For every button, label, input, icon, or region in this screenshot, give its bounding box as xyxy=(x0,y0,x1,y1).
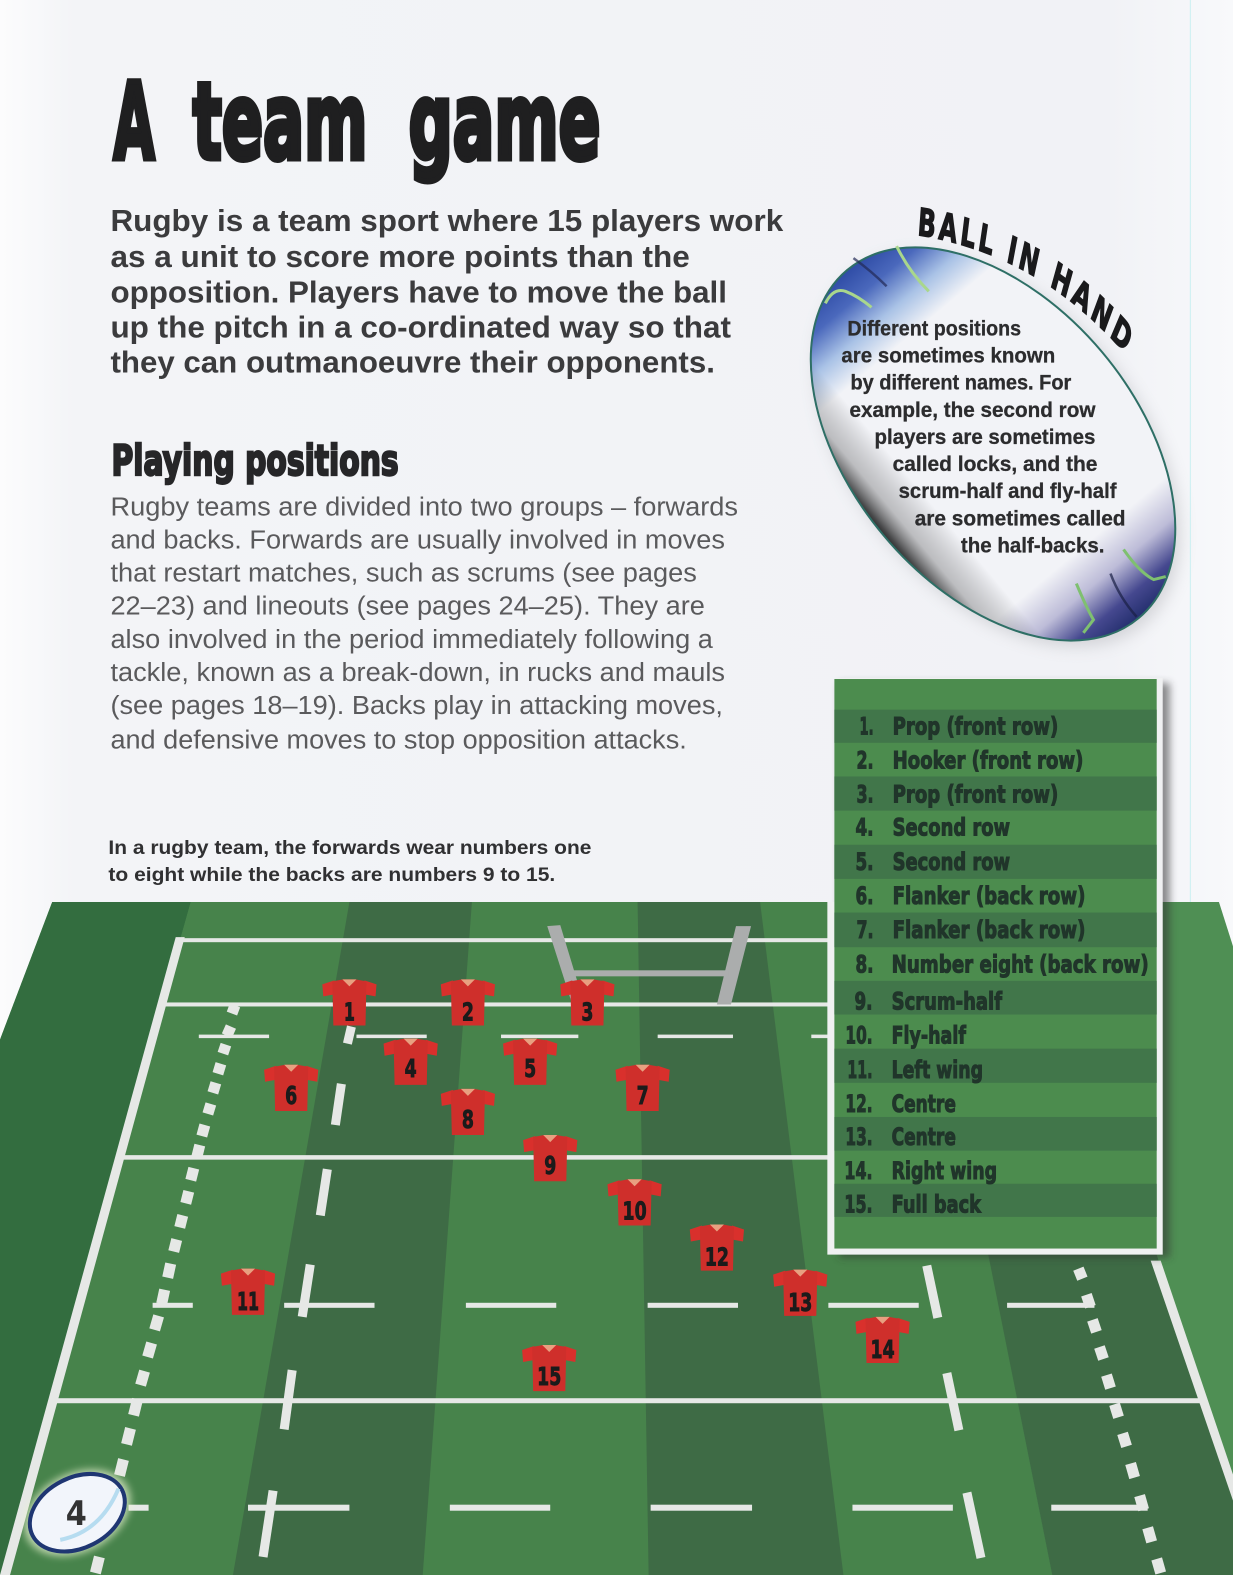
title: game xyxy=(409,61,600,185)
callout text: are sometimes known xyxy=(841,343,1055,368)
shirt 8: 8 xyxy=(462,1105,474,1134)
page number ball xyxy=(9,1452,145,1573)
shirt 9: 9 xyxy=(544,1151,556,1180)
shirt 15 xyxy=(522,1345,576,1391)
panel list: 12. xyxy=(845,1090,873,1118)
intro text xyxy=(110,205,783,380)
panel stripes xyxy=(834,710,1157,1217)
shirt 11 xyxy=(221,1269,275,1316)
shirt 8 xyxy=(441,1089,495,1135)
panel list: Fly-half xyxy=(892,1022,966,1050)
panel list: Second row xyxy=(893,848,1010,876)
body text: playing positions: (see pages 18–19). Backs play in attacking moves, xyxy=(110,690,723,720)
panel list: Centre xyxy=(892,1123,956,1151)
callout text: by different names. For xyxy=(850,370,1072,395)
panel list: Prop (front row) xyxy=(893,781,1058,809)
panel list: 11. xyxy=(847,1056,873,1084)
intro text: opposition. Players have to move the ball xyxy=(110,276,727,309)
panel list: 14. xyxy=(844,1157,873,1185)
callout text: players are sometimes xyxy=(875,424,1095,449)
panel list: Hooker (front row) xyxy=(893,746,1083,774)
players xyxy=(221,979,910,1391)
panel list: 7. xyxy=(856,916,874,944)
title: A xyxy=(113,61,155,185)
body text: playing positions: that restart matches, such as scrums (see pages xyxy=(110,558,697,588)
pitch markings xyxy=(0,937,1233,1575)
panel list: 2. xyxy=(856,746,874,774)
shirt 5 xyxy=(503,1039,557,1085)
panel list: 9. xyxy=(854,987,873,1015)
callout heading: ball in hand: BALL IN HAND xyxy=(918,206,1132,348)
heading: playing positions: Playing positions xyxy=(111,436,399,485)
title xyxy=(113,61,600,185)
inner dashes and dotted lines xyxy=(95,1005,1161,1573)
body text: playing positions: and defensive moves to stop opposition attacks. xyxy=(110,724,687,754)
panel list: 8. xyxy=(855,950,874,978)
icon: rugby ball xyxy=(738,178,1233,716)
panel list: Centre xyxy=(892,1090,956,1118)
panel: positions list xyxy=(827,678,1170,1258)
caption xyxy=(108,838,591,886)
pitch surface xyxy=(0,902,1233,1575)
shirt 12 xyxy=(690,1224,744,1272)
shirt 1: 1 xyxy=(344,998,355,1027)
body text: playing positions: also involved in the period immediately following a xyxy=(110,624,713,654)
shirt 2: 2 xyxy=(462,998,474,1027)
shirt 5: 5 xyxy=(524,1054,536,1083)
panel list: 1. xyxy=(859,712,874,740)
shirt 4: 4 xyxy=(405,1054,417,1083)
body text: playing positions xyxy=(110,491,738,754)
intro text: they can outmanoeuvre their opponents. xyxy=(110,347,715,380)
shirt 6 xyxy=(264,1065,318,1111)
callout text: the half-backs. xyxy=(961,532,1104,557)
shirt 2 xyxy=(441,979,495,1027)
panel list: Left wing xyxy=(892,1056,983,1084)
shirt 3 xyxy=(560,979,614,1027)
title: team xyxy=(193,61,367,185)
callout text: example, the second row xyxy=(849,397,1096,422)
callout text: are sometimes called xyxy=(915,505,1126,530)
shirt 4 xyxy=(384,1039,438,1085)
ball in hand callout xyxy=(810,206,1185,652)
shirt 14: 14 xyxy=(871,1335,895,1364)
panel list: 6. xyxy=(855,882,874,910)
shirt 12: 12 xyxy=(705,1243,729,1272)
body text: playing positions: 22–23) and lineouts (see pages 24–25). They are xyxy=(110,591,705,621)
rugby pitch xyxy=(0,902,1233,1575)
panel list: Scrum-half xyxy=(892,987,1002,1015)
shirt 14 xyxy=(855,1317,910,1364)
panel list: Prop (front row) xyxy=(893,712,1058,740)
panel list: 4. xyxy=(855,814,874,842)
callout text: scrum-half and fly-half xyxy=(899,478,1117,503)
shirt 7 xyxy=(615,1065,670,1111)
shirt 10 xyxy=(607,1179,662,1225)
callout text: Different positions xyxy=(847,315,1021,340)
caption: In a rugby team, the forwards wear numbers one xyxy=(108,838,591,859)
panel list: Flanker (back row) xyxy=(893,916,1085,944)
intro text: as a unit to score more points than the xyxy=(110,241,690,274)
page number ball: 4 xyxy=(66,1494,87,1534)
shirt 6: 6 xyxy=(285,1081,297,1110)
panel list: Number eight (back row) xyxy=(892,950,1149,978)
panel list: 5. xyxy=(855,848,874,876)
panel list: 15. xyxy=(844,1190,873,1218)
shirt 13: 13 xyxy=(788,1288,812,1317)
shirt 9 xyxy=(523,1135,577,1181)
panel frame xyxy=(827,678,1170,1258)
shirt 15: 15 xyxy=(537,1362,561,1391)
shirt 13 xyxy=(773,1270,827,1317)
panel list: 13. xyxy=(845,1123,873,1151)
intro text: Rugby is a team sport where 15 players work xyxy=(110,205,783,238)
shirt 11: 11 xyxy=(237,1287,259,1316)
panel list: Second row xyxy=(893,814,1010,842)
shirt 7: 7 xyxy=(637,1081,649,1110)
goal posts xyxy=(547,925,751,1004)
shirt 10: 10 xyxy=(623,1196,647,1225)
body text: playing positions: and backs. Forwards are usually involved in moves xyxy=(110,524,725,554)
panel list xyxy=(844,712,1149,1218)
caption: to eight while the backs are numbers 9 to 15. xyxy=(108,865,555,886)
body text: playing positions: tackle, known as a break-down, in rucks and mauls xyxy=(110,657,725,687)
callout text xyxy=(841,315,1126,557)
intro text: up the pitch in a co-ordinated way so that xyxy=(110,311,731,345)
shirt 1 xyxy=(322,979,377,1027)
shirt 3: 3 xyxy=(581,998,593,1027)
panel list: 10. xyxy=(845,1022,873,1050)
panel list: 3. xyxy=(856,781,874,809)
callout text: called locks, and the xyxy=(893,451,1097,476)
panel list: Flanker (back row) xyxy=(893,882,1085,910)
body text: playing positions: Rugby teams are divided into two groups – forwards xyxy=(110,491,738,521)
panel list: Full back xyxy=(892,1190,982,1218)
panel list: Right wing xyxy=(892,1157,997,1185)
